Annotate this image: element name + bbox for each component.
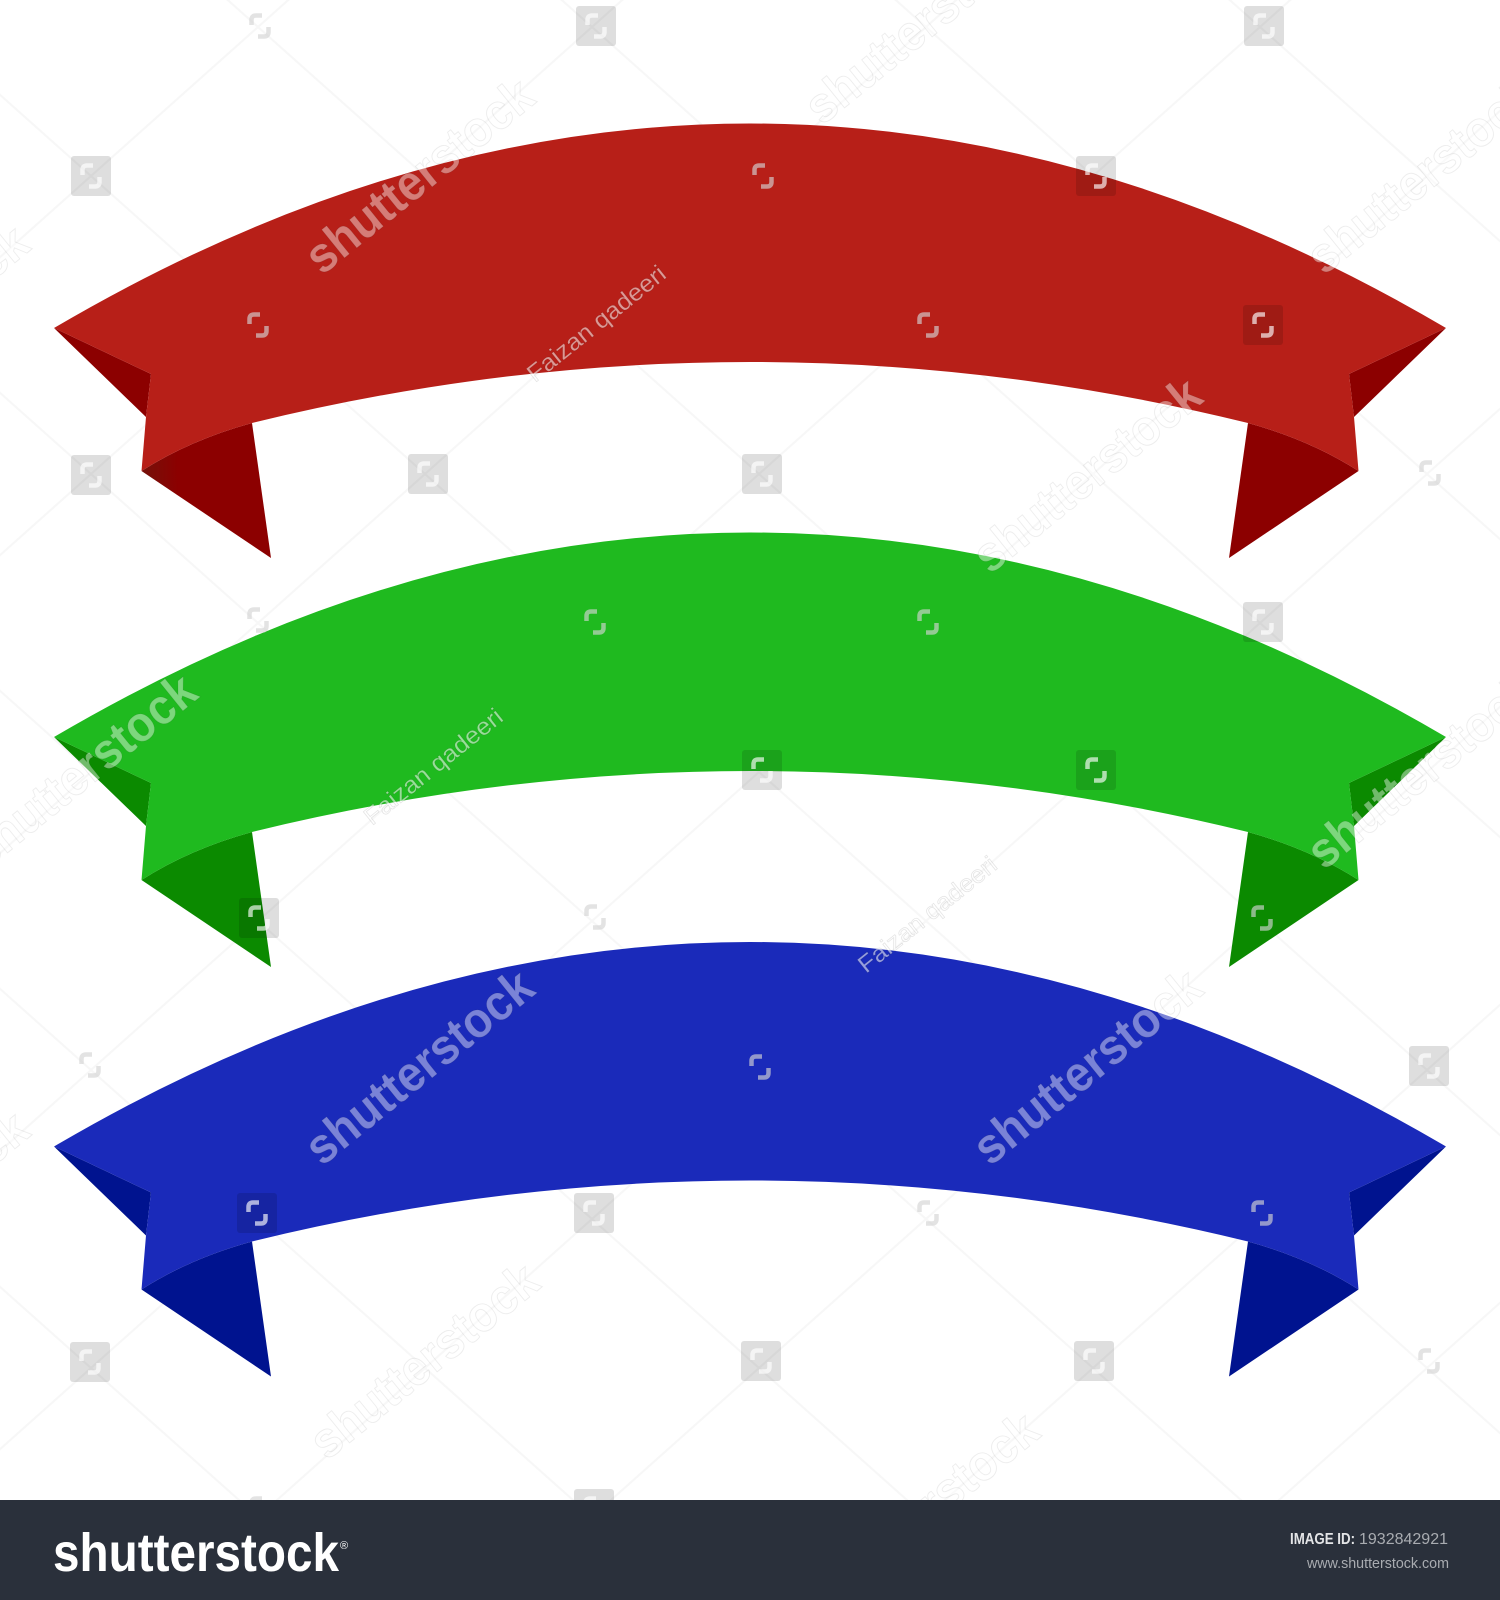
website: www.shutterstock.com bbox=[1306, 1556, 1449, 1572]
watermark text: shutterstock bbox=[299, 1252, 549, 1470]
footer logo: shutterstock bbox=[53, 1523, 340, 1583]
watermark text: shutterstock bbox=[294, 958, 544, 1176]
ribbon: green bbox=[54, 532, 1446, 967]
footer bar bbox=[0, 1500, 1500, 1600]
ribbon: red bbox=[54, 124, 1446, 558]
image id: IMAGE ID: bbox=[1290, 1531, 1355, 1548]
watermark text: shutterstock bbox=[962, 958, 1212, 1176]
watermark text: shutterstock bbox=[962, 366, 1212, 584]
watermark text: shutterstock bbox=[294, 67, 544, 285]
registered mark: ® bbox=[340, 1540, 348, 1552]
ribbon: blue bbox=[54, 942, 1446, 1376]
image id: 1932842921 bbox=[1359, 1531, 1448, 1548]
watermark text: Faizan qadeeri bbox=[359, 703, 508, 831]
watermark text: Faizan qadeeri bbox=[522, 260, 671, 388]
watermark text: Faizan qadeeri bbox=[853, 851, 1002, 979]
